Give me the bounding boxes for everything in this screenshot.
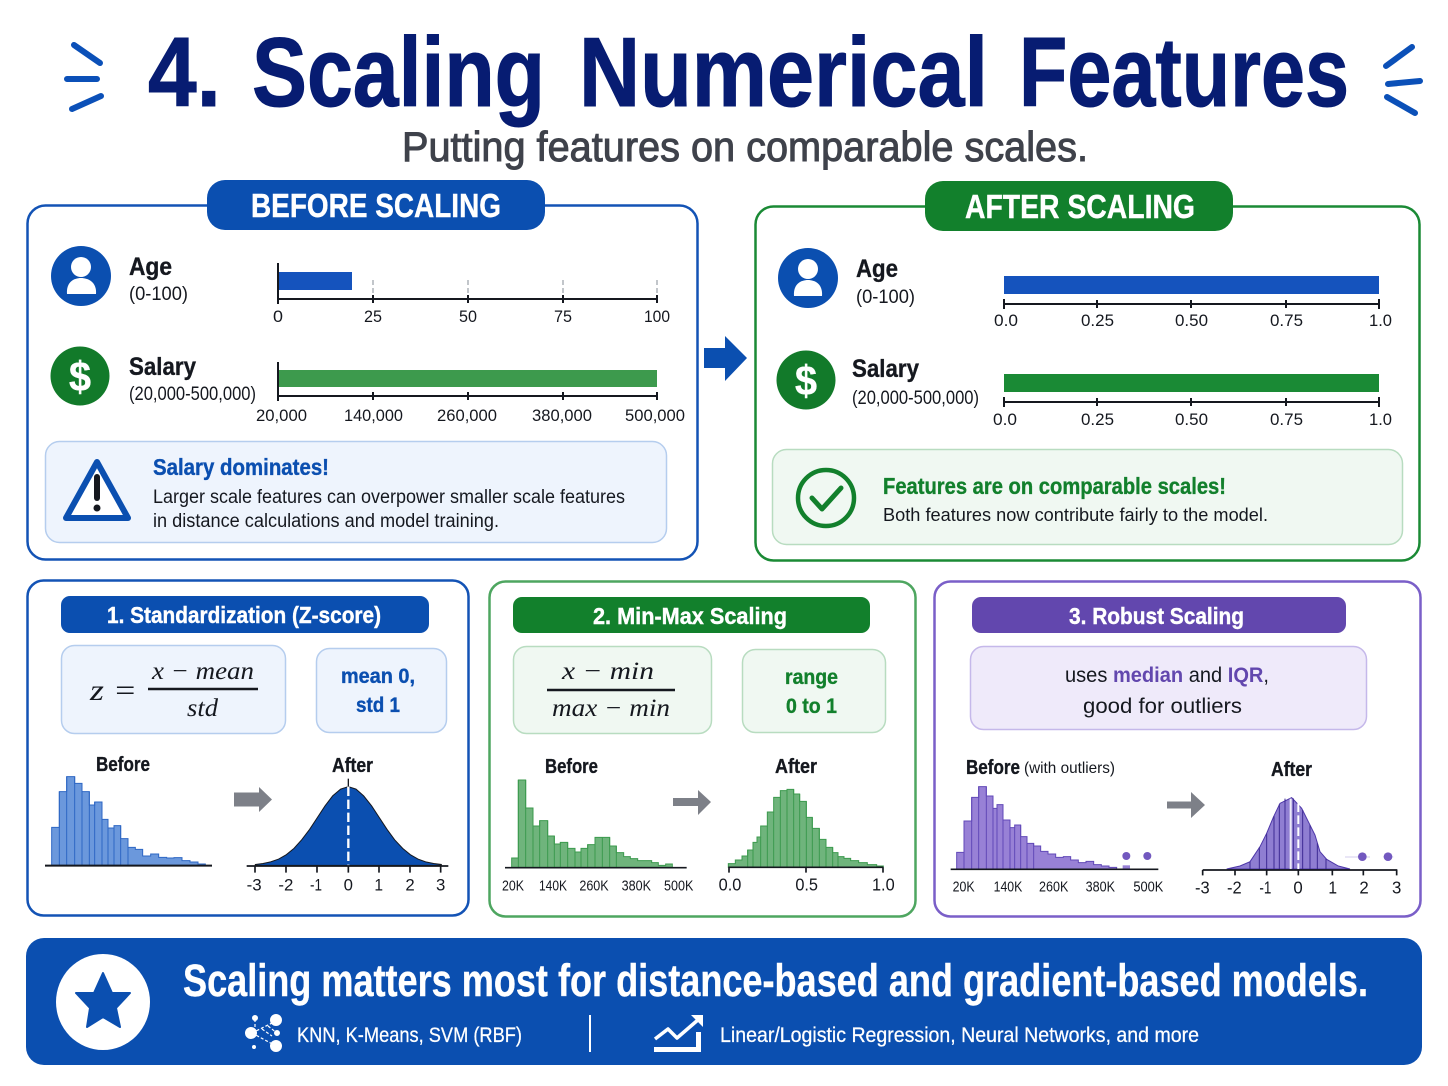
- bar: salary before: [256, 362, 685, 425]
- salary label: Salary: [852, 355, 919, 383]
- bar: age after: 1.0: [1369, 311, 1392, 330]
- min-max formula: max − min: [552, 695, 670, 722]
- bar: age before: 75: [554, 307, 572, 326]
- bar: salary after: 0.50: [1175, 410, 1208, 429]
- chart: before histogram: 20K: [953, 880, 975, 896]
- bar: salary before: 260,000: [437, 406, 497, 425]
- robust note: uses median and IQR,: [1065, 664, 1269, 687]
- icon: age person: [51, 246, 111, 306]
- bar: age before: 100: [644, 307, 670, 326]
- min-max heading: 2. Min-Max Scaling: [593, 603, 787, 629]
- min-max heading: [513, 597, 870, 633]
- chart: after histogram: 0.5: [795, 875, 818, 895]
- chart: after histogram: 0.0: [719, 875, 741, 895]
- bar: salary before: 140,000: [344, 406, 403, 425]
- callout text: [153, 454, 625, 532]
- callout: comparable scales: [772, 450, 1402, 544]
- icon: growth chart: [654, 1015, 703, 1052]
- chart: after bell curve: 1: [374, 876, 383, 895]
- after label: After: [1271, 759, 1312, 781]
- icon: salary dollar: [776, 350, 836, 410]
- mean and std note: std 1: [356, 694, 400, 717]
- before label: Before: [545, 756, 598, 778]
- age label: [129, 253, 188, 305]
- z-score formula: std: [187, 695, 219, 722]
- chart: after bell curve: 2: [405, 876, 415, 895]
- chart: after histogram: 2: [1359, 877, 1369, 897]
- bar: age before: 50: [459, 307, 477, 326]
- banner: takeaway: [26, 938, 1422, 1065]
- models text left: KNN, K-Means, SVM (RBF): [297, 1024, 522, 1047]
- subtitle: Putting features on comparable scales.: [402, 123, 1088, 170]
- chart: before histogram: 20K: [502, 879, 524, 895]
- robust heading: [972, 597, 1346, 633]
- icon: age person: [778, 248, 838, 308]
- icon: network: [246, 1014, 282, 1052]
- icon: salary dollar: $: [69, 353, 91, 400]
- models text right: Linear/Logistic Regression, Neural Networks, and more: [720, 1024, 1199, 1047]
- bar: salary after: [993, 374, 1392, 429]
- z-score formula: x − mean: [151, 658, 254, 685]
- callout text: Larger scale features can overpower smaller scale features: [153, 487, 625, 508]
- arrow: gray: [1167, 792, 1205, 818]
- standardization heading: 1. Standardization (Z-score): [107, 602, 381, 628]
- standardization heading: [61, 596, 429, 633]
- before label: Before: [96, 754, 150, 776]
- callout: salary dominates: [46, 442, 666, 542]
- salary label: [129, 353, 256, 405]
- bar: salary after: 0.75: [1270, 410, 1303, 429]
- arrow: gray: [234, 787, 272, 812]
- range note: [742, 650, 886, 732]
- icon: left sparks: [67, 45, 101, 109]
- age label: [856, 255, 915, 308]
- callout text: Features are on comparable scales!: [883, 473, 1226, 499]
- chart: before histogram: 260K: [1039, 880, 1069, 896]
- bar: age after: 0.0: [994, 311, 1018, 330]
- chart: before histogram: [502, 780, 694, 895]
- title: [148, 17, 1349, 127]
- chart: before histogram: 380K: [622, 879, 651, 895]
- icon: salary dollar: [50, 346, 110, 406]
- chart: after histogram: 1.0: [872, 875, 895, 895]
- salary label: [852, 355, 979, 409]
- bar: salary before: 380,000: [532, 406, 592, 425]
- salary label: Salary: [129, 353, 196, 381]
- chart: after bell curve: -1: [310, 876, 322, 895]
- chart: before histogram: [951, 787, 1164, 896]
- bar: age after: 0.25: [1081, 311, 1114, 330]
- range note: 0 to 1: [786, 695, 837, 718]
- chart: after histogram: [1195, 798, 1401, 897]
- panel: min-max scaling: [490, 582, 916, 916]
- arrow: before to after: [704, 336, 747, 381]
- title: 4.: [148, 17, 221, 127]
- icon: salary dollar: $: [795, 357, 817, 404]
- after label: After: [775, 756, 817, 778]
- before scaling header: BEFORE SCALING: [251, 187, 501, 224]
- divider line: [589, 1015, 591, 1052]
- bar: age before: 25: [364, 307, 382, 326]
- range note: range: [785, 666, 838, 689]
- chart: before histogram: 140K: [994, 880, 1023, 896]
- age label: (0-100): [856, 287, 915, 308]
- after scaling header: [925, 181, 1233, 231]
- salary label: (20,000-500,000): [129, 384, 256, 405]
- bar: age after: [994, 276, 1392, 330]
- panel: before scaling: [28, 180, 698, 560]
- chart: before histogram: 500K: [1133, 880, 1164, 896]
- chart: after bell curve: 3: [436, 876, 445, 895]
- callout text: in distance calculations and model training.: [153, 511, 499, 532]
- before label: (with outliers): [1024, 760, 1115, 777]
- bar: age before: 0: [273, 307, 283, 326]
- min-max formula: [514, 646, 712, 734]
- chart: after histogram: [719, 789, 895, 895]
- icon: check circle: [798, 470, 854, 526]
- arrow: gray: [673, 790, 711, 815]
- callout text: Both features now contribute fairly to the model.: [883, 505, 1268, 525]
- robust heading: 3. Robust Scaling: [1069, 603, 1244, 629]
- icon: warning triangle: [66, 462, 128, 518]
- bar: age before: [273, 263, 670, 326]
- min-max formula: x − min: [561, 658, 654, 685]
- before scaling header: [207, 180, 545, 230]
- robust note: [970, 646, 1366, 730]
- before label: Before: [966, 757, 1020, 779]
- age label: Age: [129, 253, 172, 281]
- age label: (0-100): [129, 284, 188, 305]
- title: Scaling: [252, 17, 545, 127]
- chart: after histogram: 0: [1293, 877, 1303, 897]
- panel: robust scaling: [934, 582, 1420, 916]
- icon: right sparks: [1386, 47, 1420, 113]
- after label: After: [332, 755, 373, 777]
- callout text: [883, 473, 1268, 525]
- chart: before histogram: 260K: [579, 879, 609, 895]
- chart: before histogram: 140K: [539, 879, 567, 895]
- bar: salary before: 20,000: [256, 406, 307, 425]
- mean and std note: mean 0,: [341, 665, 415, 688]
- chart: before histogram: 380K: [1086, 880, 1115, 896]
- chart: after histogram: -2: [1227, 877, 1242, 897]
- title: Features: [1019, 17, 1349, 127]
- chart: before histogram: 500K: [664, 879, 694, 895]
- title: Numerical: [579, 17, 988, 127]
- robust note: good for outliers: [1083, 695, 1242, 718]
- panel: after scaling: [756, 181, 1420, 560]
- chart: after histogram: 3: [1392, 877, 1401, 897]
- bar: salary after: 1.0: [1369, 410, 1392, 429]
- chart: after bell curve: 0: [344, 876, 353, 895]
- icon: star: [56, 954, 150, 1050]
- chart: after histogram: -1: [1259, 877, 1271, 897]
- before label: [966, 757, 1115, 779]
- bar: salary before: 500,000: [625, 406, 685, 425]
- chart: after bell curve: [247, 779, 448, 895]
- chart: after bell curve: -3: [247, 876, 262, 895]
- mean and std note: [316, 648, 446, 732]
- bar: age after: 0.75: [1270, 311, 1303, 330]
- panel: standardization: [28, 580, 468, 916]
- chart: after bell curve: -2: [278, 876, 293, 895]
- z-score formula: [62, 646, 286, 734]
- bar: salary after: 0.0: [993, 410, 1017, 429]
- chart: after histogram: -3: [1195, 877, 1210, 897]
- chart: before histogram: [45, 777, 212, 866]
- chart: after histogram: 1: [1328, 877, 1337, 897]
- z-score formula: z =: [89, 674, 137, 707]
- bar: salary after: 0.25: [1081, 410, 1114, 429]
- age label: Age: [856, 255, 898, 283]
- after scaling header: AFTER SCALING: [965, 188, 1195, 225]
- bar: age after: 0.50: [1175, 311, 1208, 330]
- salary label: (20,000-500,000): [852, 388, 979, 409]
- callout text: Salary dominates!: [153, 454, 329, 480]
